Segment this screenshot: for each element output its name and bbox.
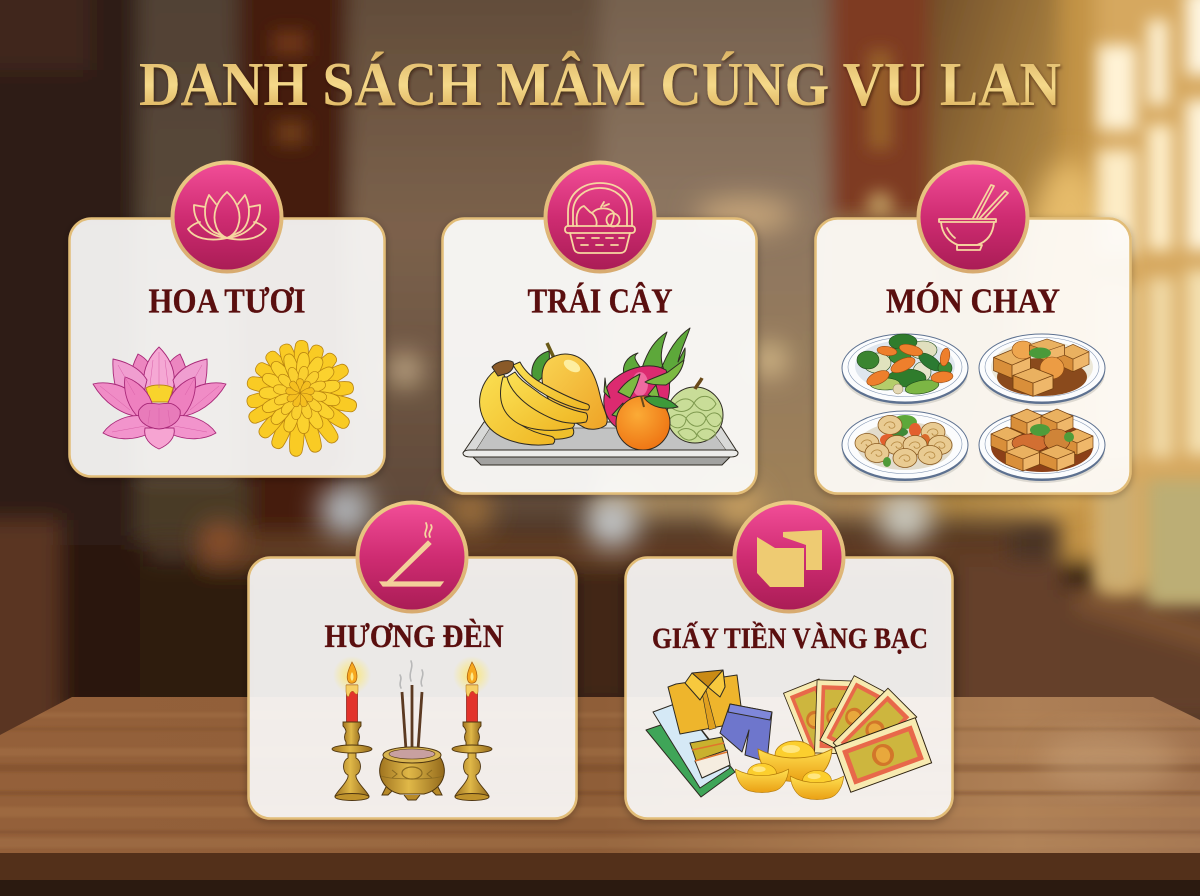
panel: hoa tươi (70, 162, 384, 476)
illustration: paper clothes (646, 670, 772, 797)
illustration: incense burner (380, 661, 444, 800)
illustration: braised tofu plate (979, 334, 1105, 406)
illustration: stir-fried vegetables plate (842, 334, 968, 406)
title: DANH SÁCH MÂM CÚNG VU LAN (139, 51, 1061, 119)
wooden table (0, 697, 1200, 896)
illustration: gold ingots (735, 741, 844, 800)
heading: MÓN CHAY (886, 280, 1060, 320)
icon: fruit basket badge (546, 162, 654, 272)
illustration: tofu in red sauce plate (979, 409, 1105, 483)
heading: GIẤY TIỀN VÀNG BẠC (652, 621, 928, 655)
illustration: pink lotus (93, 347, 226, 449)
panel: trái cây (442, 162, 756, 494)
heading: HƯƠNG ĐÈN (324, 618, 504, 655)
illustration: yellow chrysanthemum (246, 340, 358, 457)
illustration: left candle (332, 656, 372, 800)
icon: bowl and chopsticks badge (918, 162, 1028, 272)
icon: folded paper badge (734, 502, 844, 612)
illustration: mushroom rolls plate (842, 411, 968, 483)
illustration: joss paper fan (784, 676, 932, 792)
icon: lotus outline badge (172, 162, 282, 272)
illustration: right candle (452, 656, 492, 800)
panel: món chay (816, 162, 1130, 494)
heading: HOA TƯƠI (148, 282, 306, 320)
illustration: fruit tray (463, 328, 738, 465)
heading: TRÁI CÂY (528, 280, 672, 320)
icon: incense stick badge (358, 502, 466, 612)
panel: hương đèn (248, 502, 576, 818)
panel: giấy tiền vàng bạc (626, 502, 952, 818)
